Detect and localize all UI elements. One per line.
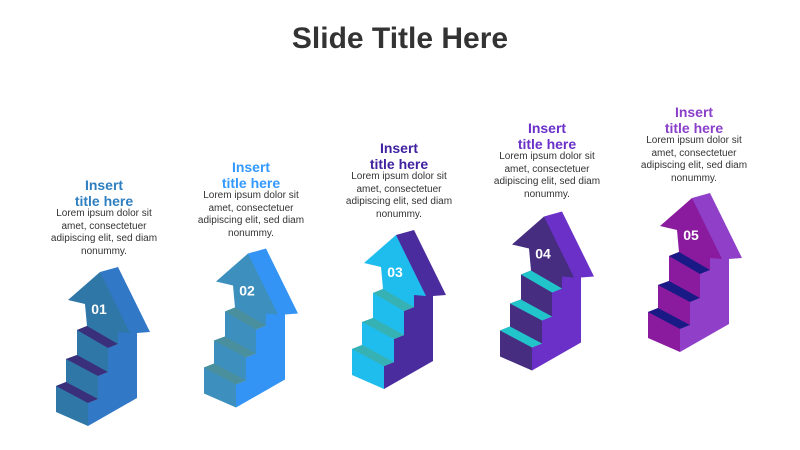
text block 03: title here (370, 156, 428, 172)
text block 02: nonummy. (228, 228, 274, 238)
stair arrow 04: 04 (535, 246, 551, 262)
stair arrow 03 (352, 230, 446, 389)
text block 04: Insert (528, 120, 566, 136)
text block 03 (346, 140, 452, 220)
text block 05: title here (665, 120, 723, 136)
text block 03: adipiscing elit, sed diam (346, 196, 452, 207)
text block 01 (51, 177, 157, 256)
stair arrow 01: 01 (91, 301, 107, 317)
text block 02: amet, consectetuer (208, 202, 294, 214)
text block 04: amet, consectetuer (504, 164, 590, 174)
text block 04: adipiscing elit, sed diam (494, 176, 600, 187)
text block 03: amet, consectetuer (356, 184, 442, 194)
text block 05: adipiscing elit, sed diam (641, 160, 747, 171)
text block 05: nonummy. (671, 172, 717, 184)
text block 05: amet, consectetuer (651, 148, 737, 158)
text block 04 (494, 120, 600, 200)
text block 03: nonummy. (376, 208, 422, 220)
text block 02: adipiscing elit, sed diam (198, 215, 304, 226)
text block 01: adipiscing elit, sed diam (51, 233, 157, 244)
stair arrow 01 (56, 267, 150, 426)
stair arrow 03: 03 (387, 264, 403, 280)
title: Slide Title Here (292, 22, 508, 55)
text block 05 (641, 104, 747, 184)
text block 02: Lorem ipsum dolor sit (203, 190, 299, 201)
text block 03: Lorem ipsum dolor sit (351, 171, 447, 182)
text block 04: nonummy. (524, 188, 570, 200)
text block 02: title here (222, 175, 280, 191)
stair arrow 02: 02 (239, 282, 255, 298)
text block 01: Lorem ipsum dolor sit (56, 208, 152, 219)
text block 01: nonummy. (81, 246, 127, 256)
stair arrow 05: 05 (683, 227, 699, 243)
stair arrow 02 (204, 248, 298, 408)
stair arrow 04 (500, 212, 594, 370)
text block 04: Lorem ipsum dolor sit (499, 151, 595, 162)
text block 05: Lorem ipsum dolor sit (646, 135, 742, 146)
text block 02: Insert (232, 159, 270, 175)
text block 01: Insert (85, 177, 123, 193)
text block 04: title here (518, 136, 576, 152)
text block 01: amet, consectetuer (61, 220, 147, 232)
text block 05: Insert (675, 104, 713, 120)
text block 01: title here (75, 193, 133, 209)
text block 03: Insert (380, 140, 418, 156)
stair arrow 05 (648, 193, 742, 352)
text block 02 (198, 159, 304, 238)
